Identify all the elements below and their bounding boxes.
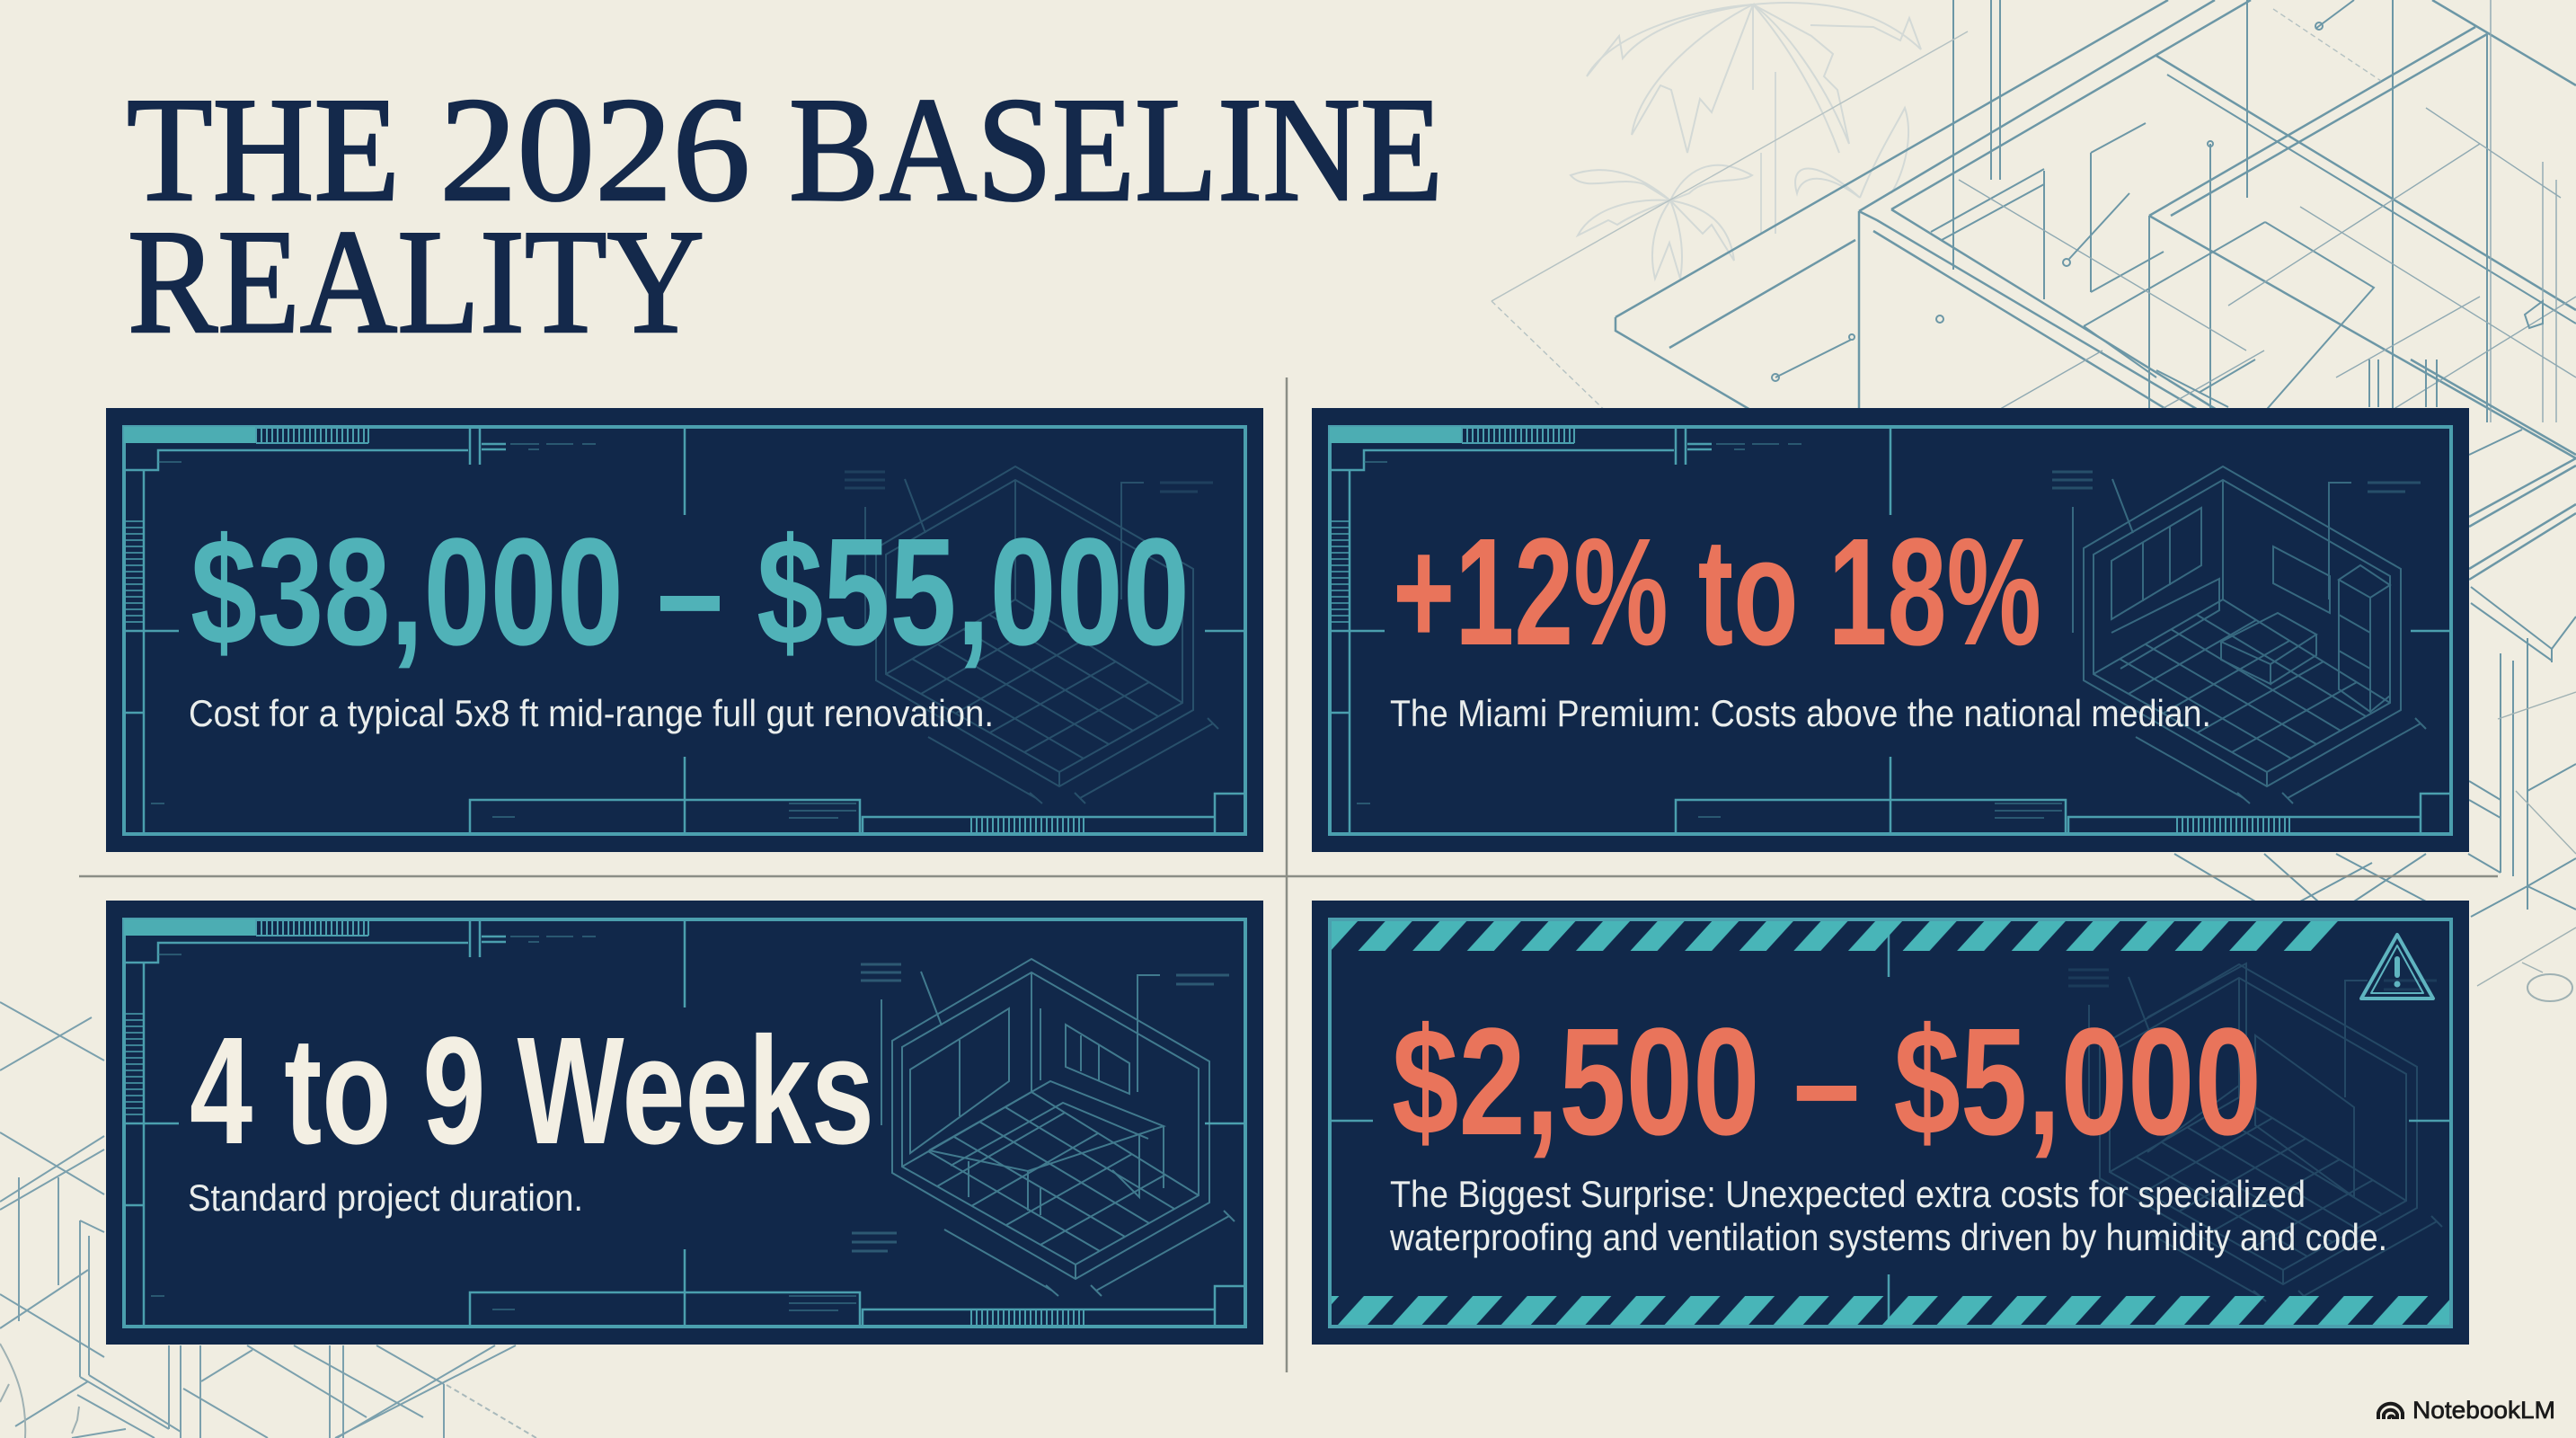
title <box>127 67 1443 364</box>
blueprint line drawing: lower left <box>0 1002 536 1438</box>
brand name: NotebookLM <box>2412 1397 2555 1424</box>
stat: percentage: +12% to 18% <box>1393 507 2041 678</box>
icon: logo arcs <box>2378 1404 2403 1419</box>
hazard stripes top <box>1332 921 2338 951</box>
room blueprint <box>852 959 1235 1296</box>
blueprint line drawing: upper right structure <box>1492 0 2576 458</box>
blueprint line drawing: right edge <box>2156 360 2576 1001</box>
title: REALITY <box>128 199 704 364</box>
caption: duration: Standard project duration. <box>188 1176 583 1219</box>
stat: weeks: 4 to 9 Weeks <box>190 1006 874 1176</box>
room blueprint <box>2052 466 2426 803</box>
caption: premium: The Miami Premium: Costs above the national median. <box>1390 692 2211 734</box>
room blueprint <box>2068 963 2442 1301</box>
room blueprint <box>845 466 1218 803</box>
panel: Miami premium <box>1312 408 2469 852</box>
dividers <box>79 377 2498 1372</box>
caption: surprise: The Biggest Surprise: Unexpected extra costs for specialized <box>1390 1173 2306 1215</box>
hazard stripes bottom <box>1332 1296 2449 1325</box>
frame <box>1330 919 2451 1327</box>
logo: NotebookLM <box>2378 1397 2555 1424</box>
title: BASELINE <box>789 67 1443 232</box>
panel: total cost <box>106 408 1263 852</box>
stat: cost range: $38,000 – $55,000 <box>190 507 1190 678</box>
panel: duration <box>106 901 1263 1345</box>
caption: surprise: waterproofing and ventilation systems driven by humidity and code. <box>1389 1216 2387 1258</box>
caption: surprise <box>1389 1173 2387 1258</box>
icon: warning triangle <box>2361 935 2433 999</box>
blueprint line drawing: palm trees <box>1571 3 1921 279</box>
panel: biggest surprise <box>1312 901 2469 1345</box>
title: THE <box>127 67 400 232</box>
stat: surprise cost: $2,500 – $5,000 <box>1392 997 2262 1167</box>
caption: cost: Cost for a typical 5x8 ft mid-range full gut renovation. <box>189 692 994 734</box>
title: 2026 <box>439 67 750 232</box>
